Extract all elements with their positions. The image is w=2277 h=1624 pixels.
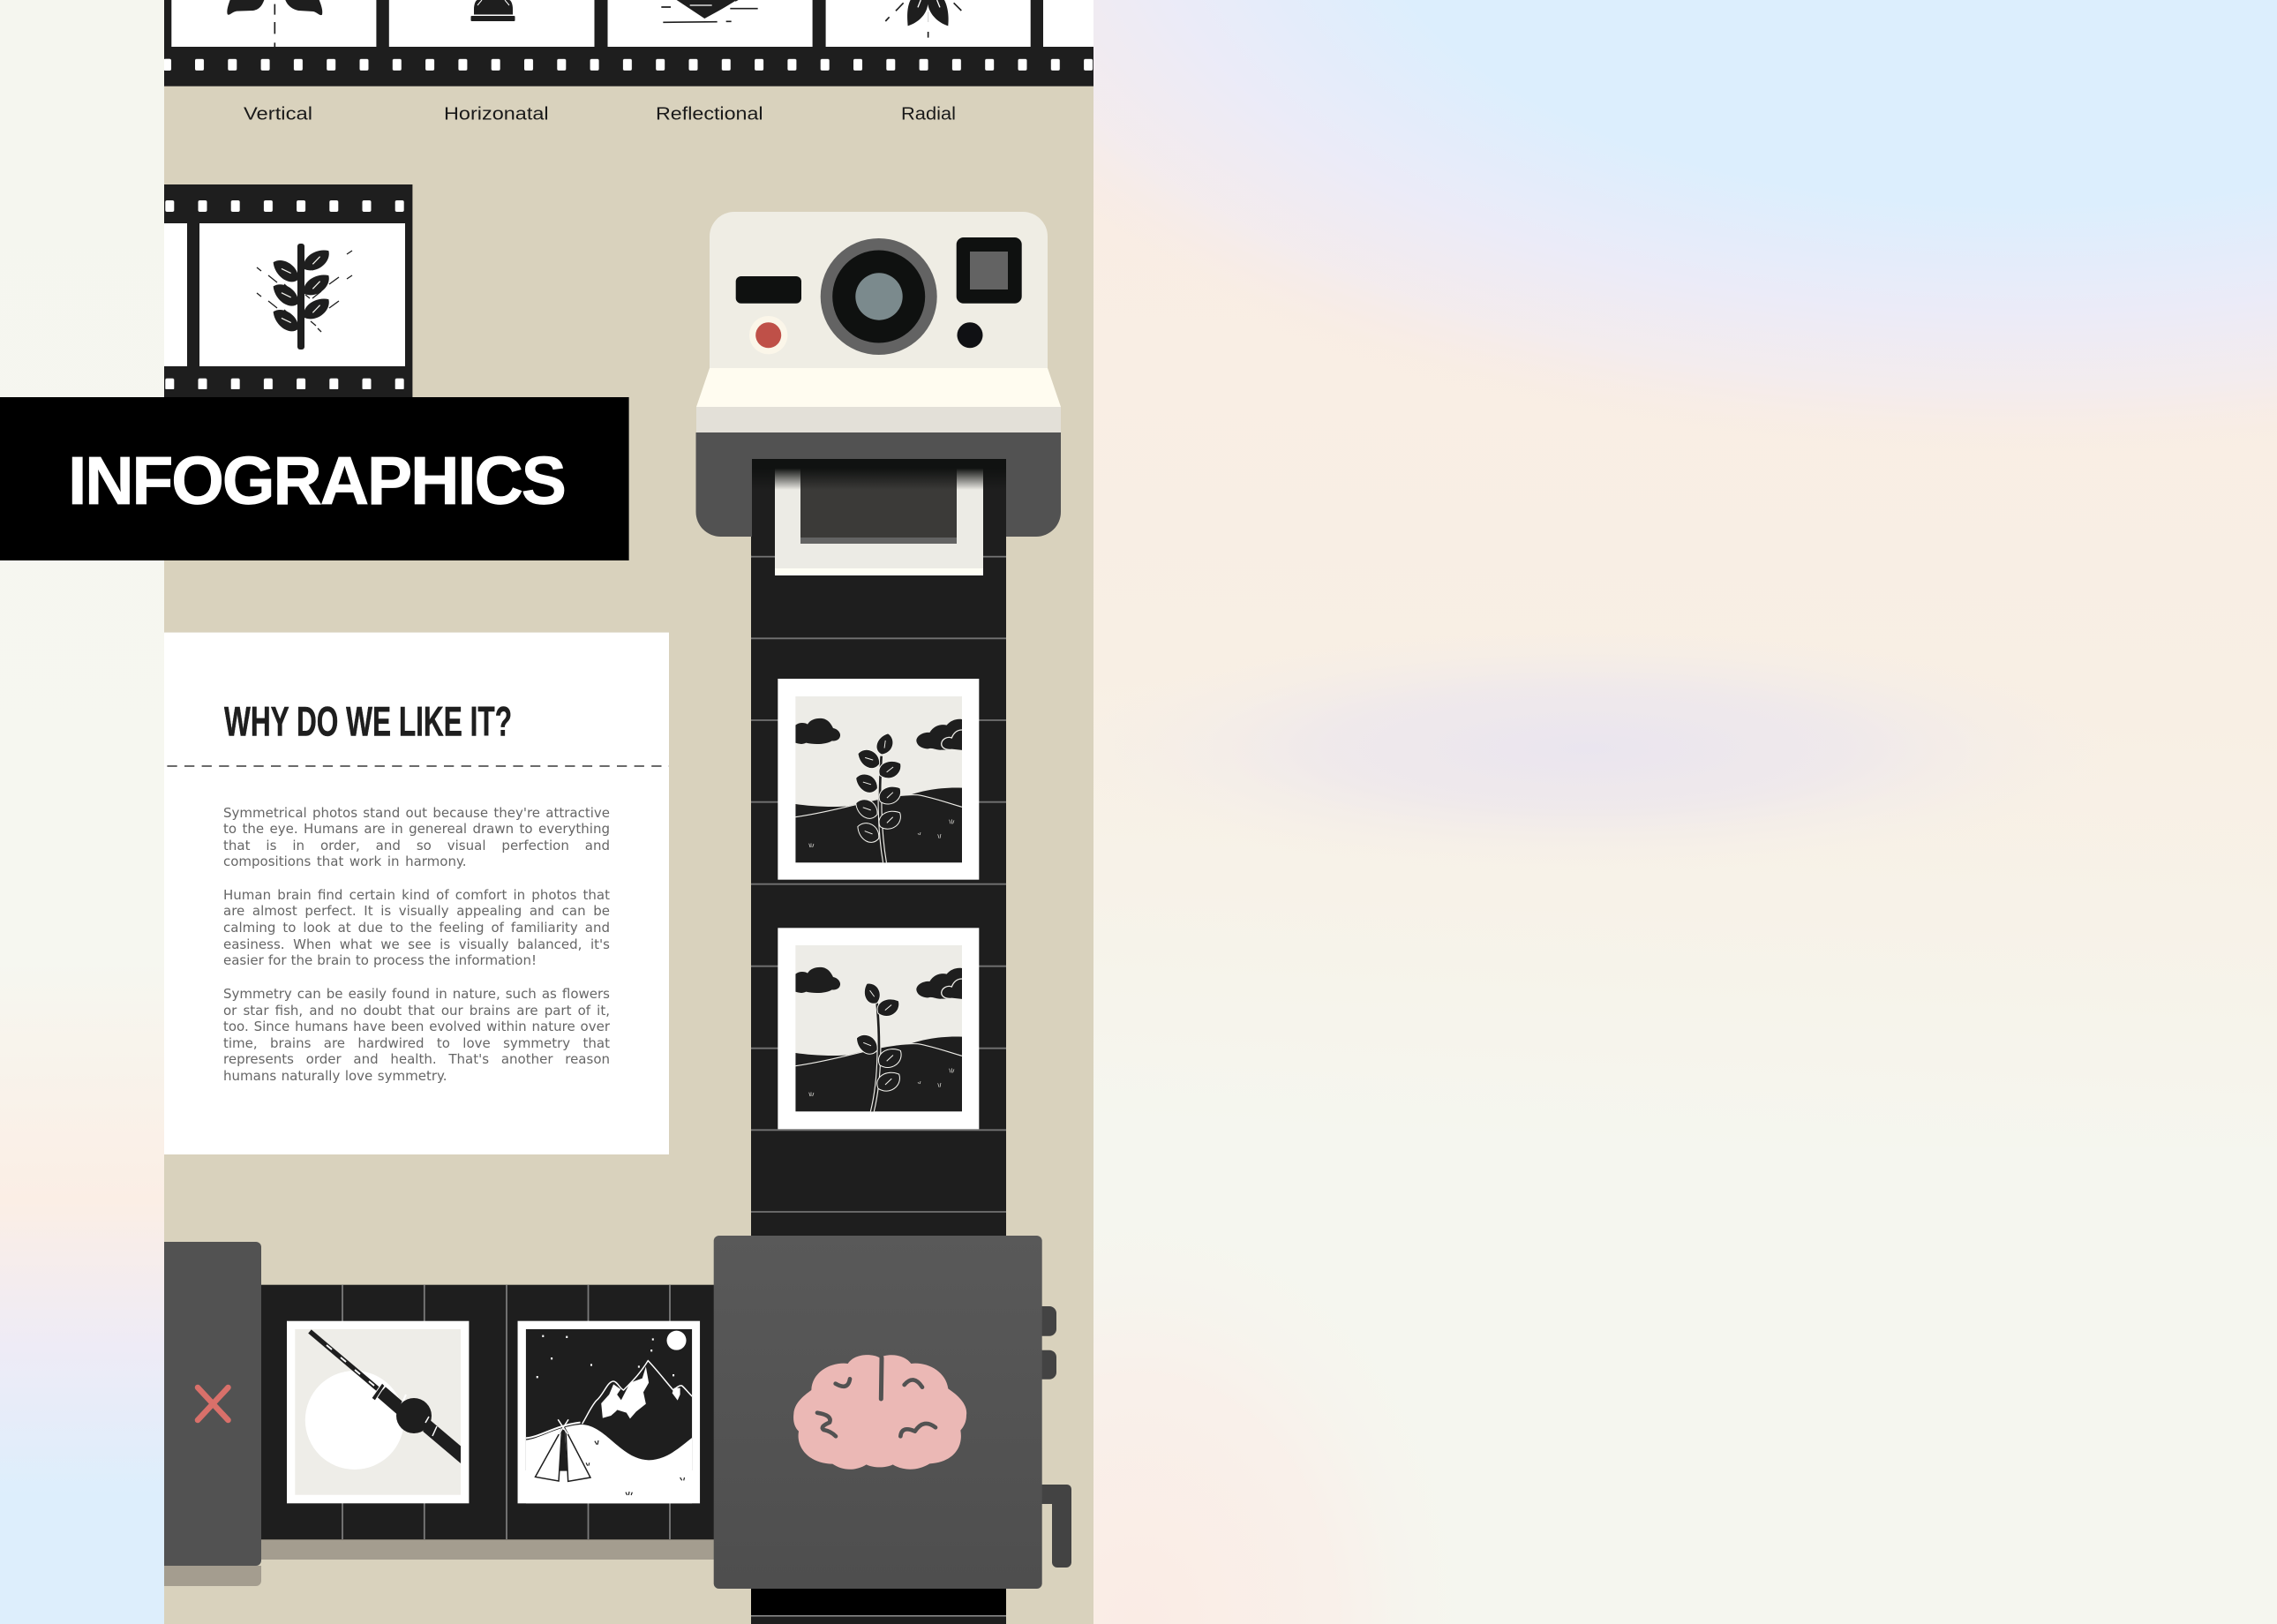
body text: paragraph two: are almost perfect. It is visually appealing and can be xyxy=(223,903,610,919)
camera lens xyxy=(821,238,937,355)
sensor dot xyxy=(957,322,983,348)
film frame: plant icon xyxy=(164,184,412,401)
body text: paragraph one: that is in order, and so visual perfection and xyxy=(223,838,610,853)
body text: paragraph three: humans naturally love symmetry. xyxy=(223,1068,447,1084)
body text: paragraph one: compositions that work in harmony. xyxy=(223,853,466,869)
machine box: reject xyxy=(164,1242,261,1566)
icon: instant camera xyxy=(695,212,1061,537)
body text: paragraph one: Symmetrical photos stand out because they're attractive xyxy=(223,805,610,821)
polaroid: mountains and tent at night xyxy=(518,1321,700,1503)
polaroid: plant with asymmetric leaves xyxy=(778,928,979,1129)
camera lower body xyxy=(695,432,1061,537)
tent xyxy=(536,1419,590,1481)
body text: paragraph three: Symmetry can be easily found in nature, such as flowers xyxy=(223,986,610,1002)
body text: paragraph two: easiness. When what we see is visually balanced, it's xyxy=(223,936,610,952)
body text: paragraph three: represents order and health. That's another reason xyxy=(223,1051,610,1067)
background: right gradient area xyxy=(1093,0,2277,1624)
body text: paragraph three: or star fish, and no doubt that our brains are part of it, xyxy=(223,1003,610,1019)
shutter button xyxy=(749,316,787,354)
polaroid: tower and sun xyxy=(287,1321,469,1503)
labels: symmetry type names xyxy=(244,105,956,124)
body text: paragraph three: time, brains are hardwired to love symmetry that xyxy=(223,1035,610,1051)
polaroid: plant with uneven leaves xyxy=(778,679,979,880)
labels: symmetry type names: Horizonatal xyxy=(444,105,549,124)
body text: paragraph two xyxy=(223,887,610,968)
icon: red cross xyxy=(198,1387,228,1420)
machine box: brain xyxy=(714,1236,1042,1589)
icon: vertical symmetry butterfly xyxy=(227,0,322,47)
panel: beige poster xyxy=(164,0,1093,1624)
body text: paragraph two: calming to look at due to the feeling of familiarity and xyxy=(223,920,610,936)
camera top body xyxy=(710,212,1048,368)
body text: paragraph three xyxy=(223,986,611,1084)
icon: reflectional symmetry diamond xyxy=(661,0,758,22)
machine box: reject shadow xyxy=(164,1566,261,1586)
body text: paragraph two: Human brain find certain kind of comfort in photos that xyxy=(223,887,610,903)
body text: paragraph one xyxy=(223,805,610,869)
film roll: horizontal strip xyxy=(256,1285,719,1539)
film strip: symmetry types xyxy=(164,0,1093,86)
title banner xyxy=(0,397,629,560)
labels: symmetry type names: Radial xyxy=(901,105,956,124)
icon: symmetrical plant xyxy=(257,244,352,350)
film slot and ejecting photo xyxy=(751,459,1006,583)
body text: paragraph three: too. Since humans have been evolved within nature over xyxy=(223,1019,610,1034)
film roll: vertical strip xyxy=(751,459,1006,1624)
heading: WHY DO WE LIKE IT? xyxy=(224,699,512,746)
viewfinder xyxy=(957,237,1022,304)
icon: pink brain xyxy=(793,1355,966,1470)
body text: paragraph two: easier for the brain to process the information! xyxy=(223,952,537,968)
panel: why do we like it xyxy=(164,633,669,1154)
labels: symmetry type names: Vertical xyxy=(244,105,312,124)
machine knobs and handle xyxy=(1037,1306,1071,1568)
background: left gradient strip xyxy=(0,0,164,1624)
body text: paragraph one: to the eye. Humans are in genereal drawn to everything xyxy=(223,821,610,837)
camera slanted ledge xyxy=(696,368,1061,407)
icon: radial symmetry leaves xyxy=(885,0,961,38)
camera flash bar xyxy=(736,276,801,304)
title: INFOGRAPHICS xyxy=(68,443,567,519)
labels: symmetry type names: Reflectional xyxy=(656,105,763,124)
film roll: horizontal strip shadow xyxy=(164,1539,720,1560)
icon: horizontal symmetry bell xyxy=(471,0,515,21)
